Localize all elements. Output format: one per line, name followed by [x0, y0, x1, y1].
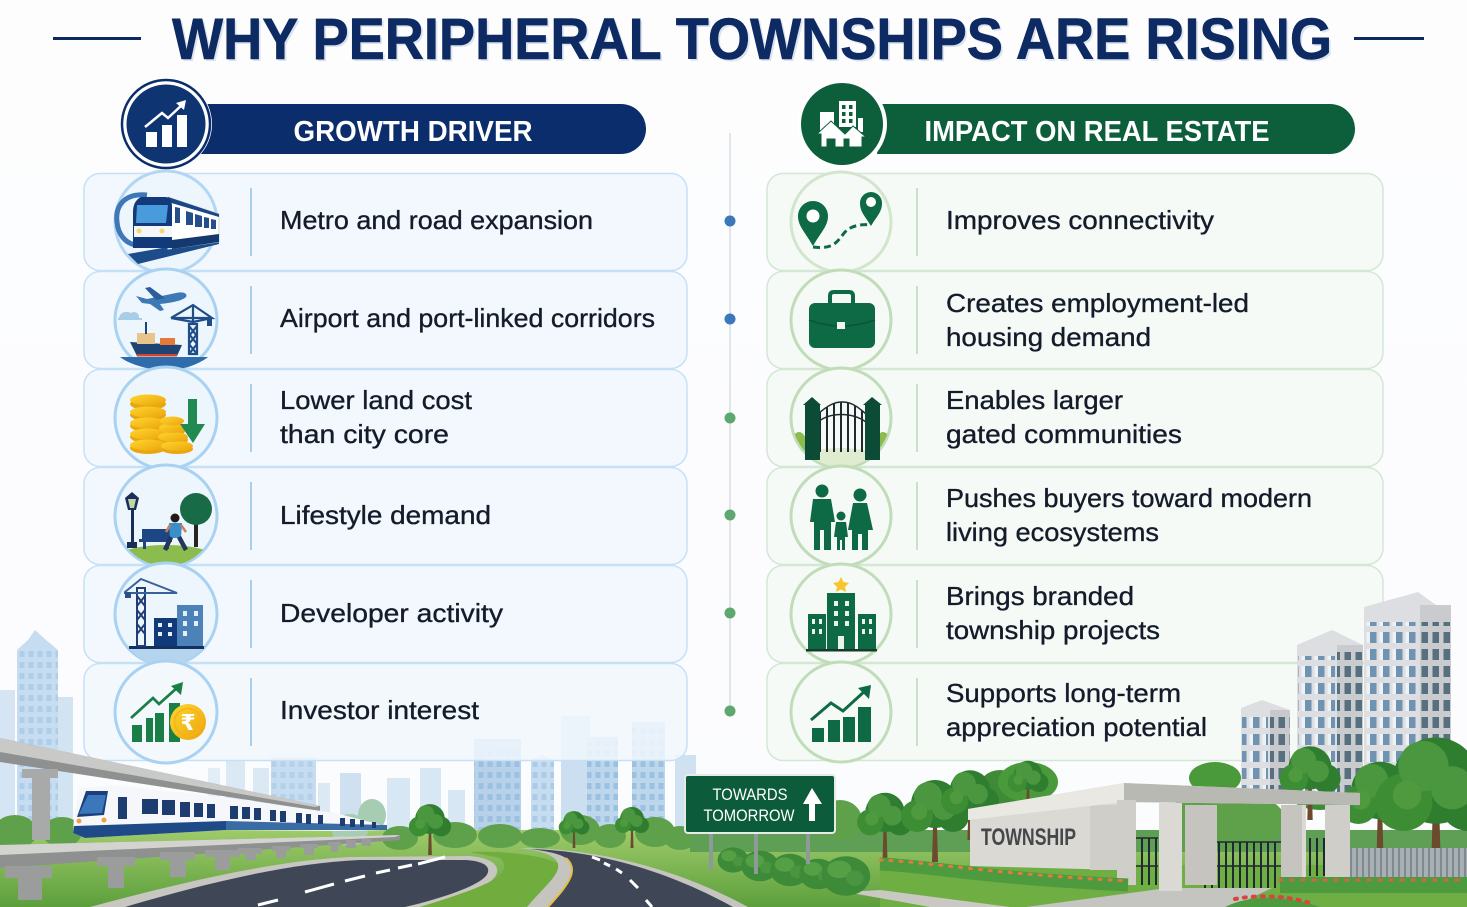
- icon: buildings with star: [791, 564, 891, 664]
- row: long-term appreciation: [767, 662, 1383, 762]
- panel: impact header: IMPACT ON REAL ESTATE: [924, 116, 1270, 148]
- row: airport corridors: Airport and port-linked corridors: [280, 303, 655, 333]
- scene: elevated metro guideway and train: [0, 738, 400, 900]
- icon: park with runner: [114, 465, 218, 575]
- row: investor interest: [84, 661, 687, 763]
- icon: growth chart badge: [120, 78, 212, 170]
- icon: growth chart: [791, 662, 891, 762]
- panel: impact header: [797, 79, 1355, 169]
- row: long-term appreciation: Supports long-term: [946, 678, 1181, 708]
- icon: buildings badge: [797, 79, 887, 169]
- scene: background tree line: [0, 750, 1467, 907]
- icon: coins and down arrow: [115, 367, 217, 469]
- scene: flower beds and bushes: [718, 847, 1467, 907]
- row: improves connectivity: Improves connectivity: [946, 205, 1214, 235]
- icon: crane and buildings: [115, 563, 217, 665]
- sign: towards tomorrow: TOWARDS: [712, 785, 788, 804]
- row: metro and road expansion: Metro and road expansion: [280, 205, 593, 235]
- panel: growth driver header: [120, 78, 646, 170]
- train: [73, 785, 387, 838]
- township sign text: TOWNSHIP: [981, 824, 1076, 851]
- panel: real estate impact list: [767, 172, 1383, 762]
- row: airport corridors: [84, 269, 687, 371]
- panel: growth drivers list: [84, 171, 687, 763]
- row: developer activity: Developer activity: [280, 598, 503, 628]
- sign: towards tomorrow: [685, 775, 835, 874]
- row: long-term appreciation: appreciation potential: [946, 712, 1207, 742]
- row: investor interest: Investor interest: [280, 695, 480, 725]
- title: WHY PERIPHERAL TOWNSHIPS ARE RISING: [174, 9, 1334, 74]
- row: lower land cost: Lower land cost: [280, 385, 473, 415]
- row: lower land cost: than city core: [280, 419, 449, 449]
- icon: green chart with rupee coin: [115, 661, 217, 763]
- icon: gate: [791, 368, 891, 468]
- panel: growth driver header: GROWTH DRIVER: [294, 116, 533, 148]
- icon: up arrow: [803, 788, 822, 821]
- row: improves connectivity: [767, 172, 1383, 272]
- row: employment housing demand: housing demand: [946, 322, 1151, 352]
- icon: green chart with rupee coin: ₹: [180, 711, 196, 736]
- row: branded township projects: township projects: [946, 615, 1160, 645]
- row: modern living ecosystems: living ecosystems: [946, 517, 1159, 547]
- row: modern living ecosystems: [767, 466, 1383, 566]
- row: branded township projects: Brings branded: [946, 581, 1134, 611]
- row: metro and road expansion: [84, 171, 687, 273]
- row: modern living ecosystems: Pushes buyers toward modern: [946, 483, 1312, 513]
- row: lifestyle demand: Lifestyle demand: [280, 500, 491, 530]
- row: branded township projects: [767, 564, 1383, 664]
- sign: towards tomorrow: TOMORROW: [704, 806, 794, 825]
- scene: township gate: [846, 783, 1467, 907]
- icon: briefcase: [791, 270, 891, 370]
- scene: roads: [90, 848, 748, 907]
- row: gated communities: [767, 368, 1383, 468]
- icon: family: [791, 466, 891, 566]
- icon: plane ship crane: [115, 269, 217, 371]
- row: developer activity: [84, 563, 687, 665]
- scene: residential towers: [1241, 592, 1451, 810]
- row: gated communities: Enables larger: [946, 385, 1123, 415]
- title: WHY PERIPHERAL TOWNSHIPS ARE RISING: [172, 7, 1332, 72]
- center timeline: [724, 133, 736, 716]
- row: employment housing demand: [767, 270, 1383, 370]
- row: lower land cost: [84, 367, 687, 469]
- scene: foreground trees: [409, 737, 1467, 885]
- background skyline left: [0, 630, 696, 849]
- row: lifestyle demand: [84, 465, 687, 575]
- row: employment housing demand: Creates employment-led: [946, 288, 1249, 318]
- icon: map pins: [791, 172, 891, 272]
- icon: metro train: [115, 171, 219, 273]
- row: gated communities: gated communities: [946, 419, 1182, 449]
